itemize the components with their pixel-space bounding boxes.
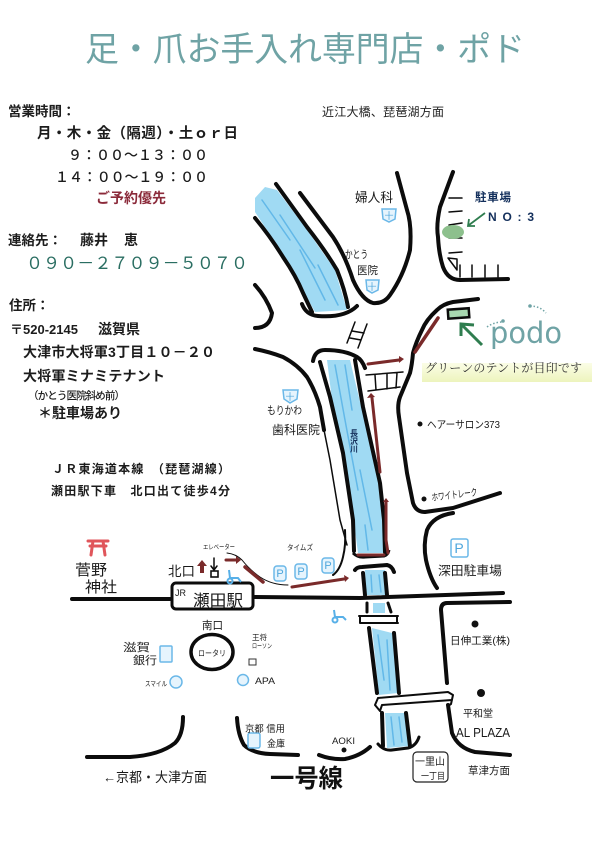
label: AOKI: AOKI: [332, 736, 355, 746]
arrow to parking: [468, 213, 485, 226]
icon: Smile: [170, 676, 182, 688]
label: Shinkin bank: 京都 信用: [245, 723, 285, 735]
label: Ohsho and Lawson: 王将: [252, 632, 267, 642]
label: Fukada parking: P: [454, 540, 464, 556]
walking directions: 瀬田駅下車 北口出て徒歩4分: [51, 483, 230, 498]
elevator label: エレベーター: [203, 542, 235, 551]
label: gynecology: 婦人科: [355, 190, 393, 205]
river: upper section: [255, 184, 357, 316]
landmark note: （かとう医院斜め前）: [28, 389, 125, 402]
label: Shiga bank: 滋賀: [123, 641, 150, 654]
parking lot no. 3: [442, 190, 534, 277]
parking space highlight: [442, 225, 464, 239]
label: AOKI: [332, 736, 355, 752]
label: Ohsho and Lawson: ローソン: [252, 643, 272, 650]
street address: 大津市大将軍3丁目１０－２０: [23, 344, 215, 360]
parking icons: [274, 558, 334, 581]
label: hair salon: ヘアーサロン373: [427, 419, 500, 431]
parking icons: P: [276, 568, 284, 580]
shop marker: green tent: [448, 308, 469, 319]
text block: contact: [8, 232, 248, 273]
label: Sugano shrine: [75, 541, 117, 596]
label: Shinkin bank: [245, 723, 285, 750]
tent note with yellow highlight: [422, 361, 592, 382]
direction label: Omi bridge and Lake Biwa: 近江大橋、琵琶湖方面: [322, 104, 444, 119]
label: Heiwado AL PLAZA: AL PLAZA: [456, 725, 510, 740]
podo logo: podo: [490, 316, 562, 350]
afternoon hours: １４：００～１９：００: [55, 169, 208, 185]
contact name: 藤井: [80, 232, 108, 248]
river: lower section: [369, 628, 419, 750]
label: Heiwado AL PLAZA: 平和堂: [463, 708, 493, 720]
crossing at top of river: [347, 322, 403, 391]
station exit: north: 北口: [168, 564, 195, 579]
route arrows: along the river: [358, 318, 438, 555]
train line: ＪＲ東海道本線 （琵琶湖線）: [52, 461, 230, 476]
icon: bank: [160, 646, 172, 662]
label: Smile: スマイル: [145, 680, 167, 688]
arrow to tent: [461, 324, 482, 345]
label: Morikawa dental: [267, 390, 320, 437]
map: [72, 172, 592, 793]
heading: hours: 営業時間：: [8, 103, 76, 119]
contact label: 連絡先：: [8, 232, 62, 248]
label: Ohsho and Lawson: [249, 632, 272, 665]
label: Fukada parking: 深田駐車場: [438, 563, 502, 578]
label: Heiwado AL PLAZA: [456, 689, 510, 740]
label: Kato clinic: かとう: [345, 248, 368, 261]
text block: access: [51, 461, 230, 498]
label: Shinkin bank: 金庫: [267, 738, 285, 750]
label: Kato clinic: [345, 248, 379, 293]
label: Ichiriyama sign: 一里山: [415, 756, 445, 768]
label: APA: [238, 674, 276, 687]
icon: torii gate: [88, 541, 108, 555]
parking corner mark: [448, 258, 457, 270]
postal code: 〒520-2145: [10, 322, 78, 337]
roundabout: ロータリ: [198, 649, 226, 658]
label: Sugano shrine: 菅野: [75, 562, 107, 579]
river: middle section: [313, 350, 389, 557]
label: toward Kusatsu: 草津方面: [468, 764, 510, 777]
north arrow: [197, 560, 207, 573]
building name: 大将軍ミナミテナント: [23, 368, 165, 384]
label: White Lake: ホワイトレーク: [431, 486, 478, 504]
icon: wheelchair north: [228, 570, 241, 584]
prefecture: 滋賀県: [98, 321, 140, 337]
heading: address: 住所：: [9, 297, 50, 313]
contact given name: 恵: [124, 232, 138, 248]
railway line: [72, 593, 503, 599]
parking label: 駐車場: [475, 190, 512, 204]
label: Smile: [145, 676, 182, 688]
roundabout: [191, 634, 233, 670]
text block: business hours: [8, 103, 238, 206]
label: Morikawa dental: 歯科医院: [272, 423, 320, 437]
icon: dental clinic: 十: [285, 391, 295, 402]
label: Nisshin Industries: [450, 620, 510, 647]
label: toward Kyoto and Otsu: ←京都・大津方面: [103, 770, 207, 785]
route arrows from station: [226, 556, 349, 587]
icon: elevator: [211, 558, 218, 577]
icon: clinic: 十: [384, 210, 394, 221]
phone number: ０９０－２７０９－５０７０: [26, 254, 248, 273]
station name: 瀬田駅: [193, 592, 243, 610]
icon: clinic: 十: [367, 281, 377, 292]
label: Kato clinic: 医院: [357, 264, 378, 277]
label: Shiga bank: 銀行: [133, 653, 157, 667]
icon: wheelchair south: [332, 610, 346, 622]
roads: [87, 172, 510, 759]
JR label: JR: [175, 588, 186, 598]
bridge: large: [375, 692, 453, 711]
river name: 長沢川: [350, 429, 358, 453]
label: White Lake: [422, 486, 478, 504]
reservation note: ご予約優先: [96, 190, 166, 206]
parking number: NO:3: [488, 210, 534, 224]
label: Fukada parking: [438, 539, 502, 578]
label: Ichiriyama sign: [413, 752, 448, 782]
label: Route 1: 一号線: [270, 765, 343, 793]
label: Shiga bank: [123, 641, 172, 667]
walking path: elevator curve: [227, 553, 288, 585]
morning hours: ９：００～１３：００: [68, 147, 208, 163]
label: Sugano shrine: 神社: [85, 579, 117, 596]
tent note with yellow highlight: グリーンのテントが目印です: [425, 361, 582, 375]
icon: bank: [248, 733, 260, 748]
station building: [172, 583, 253, 610]
label: Morikawa dental: もりかわ: [267, 404, 302, 417]
station exit: south: 南口: [202, 619, 223, 632]
time-based parking label: タイムズ: [287, 542, 313, 552]
parking spaces: [449, 198, 498, 277]
label: APA: APA: [255, 676, 276, 687]
parking note: ＊駐車場あり: [38, 405, 122, 421]
open days: 月・木・金（隔週）・土ｏｒ日: [37, 124, 238, 142]
bridge: small: [359, 616, 398, 623]
river: under railway: [355, 565, 394, 613]
label: Ichiriyama sign: 一丁目: [421, 771, 445, 781]
parking icons: P: [297, 566, 305, 578]
parking icons: P: [324, 560, 332, 572]
title: 足・爪お手入れ専門店・ポド: [85, 31, 525, 69]
text block: address: [9, 297, 215, 421]
label: gynecology: [355, 190, 396, 222]
label: Nisshin Industries: 日伸工業(株): [450, 634, 510, 647]
